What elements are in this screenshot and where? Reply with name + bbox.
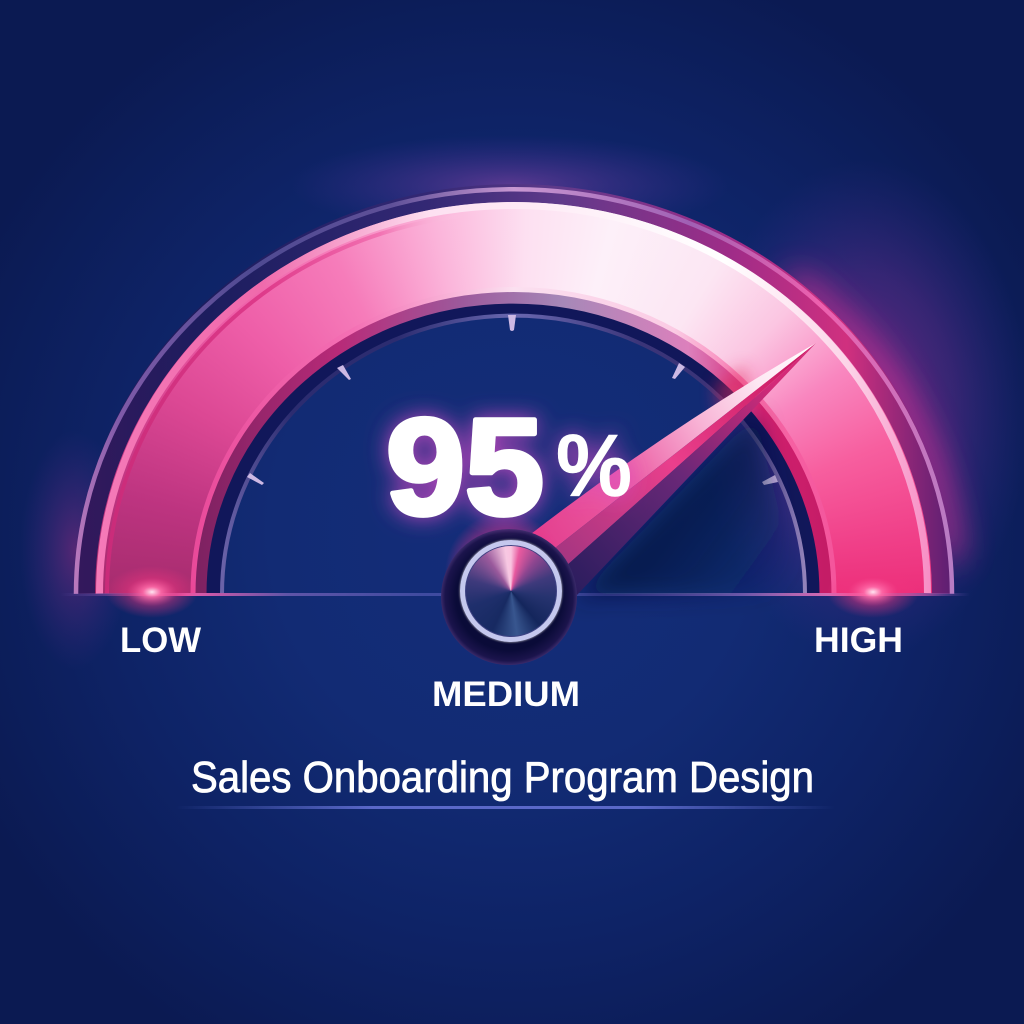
knob dial: [460, 540, 562, 642]
title: Sales Onboarding Program Design: [191, 753, 814, 802]
percentage readout: %: [556, 416, 632, 515]
gauge band: [95, 202, 932, 594]
scale labels: HIGH: [814, 621, 903, 660]
scale labels: MEDIUM: [432, 675, 580, 714]
right arc glow: [790, 278, 952, 560]
percentage readout: 95: [386, 391, 544, 544]
scale labels: LOW: [120, 621, 201, 660]
needle shadow: [575, 415, 800, 600]
